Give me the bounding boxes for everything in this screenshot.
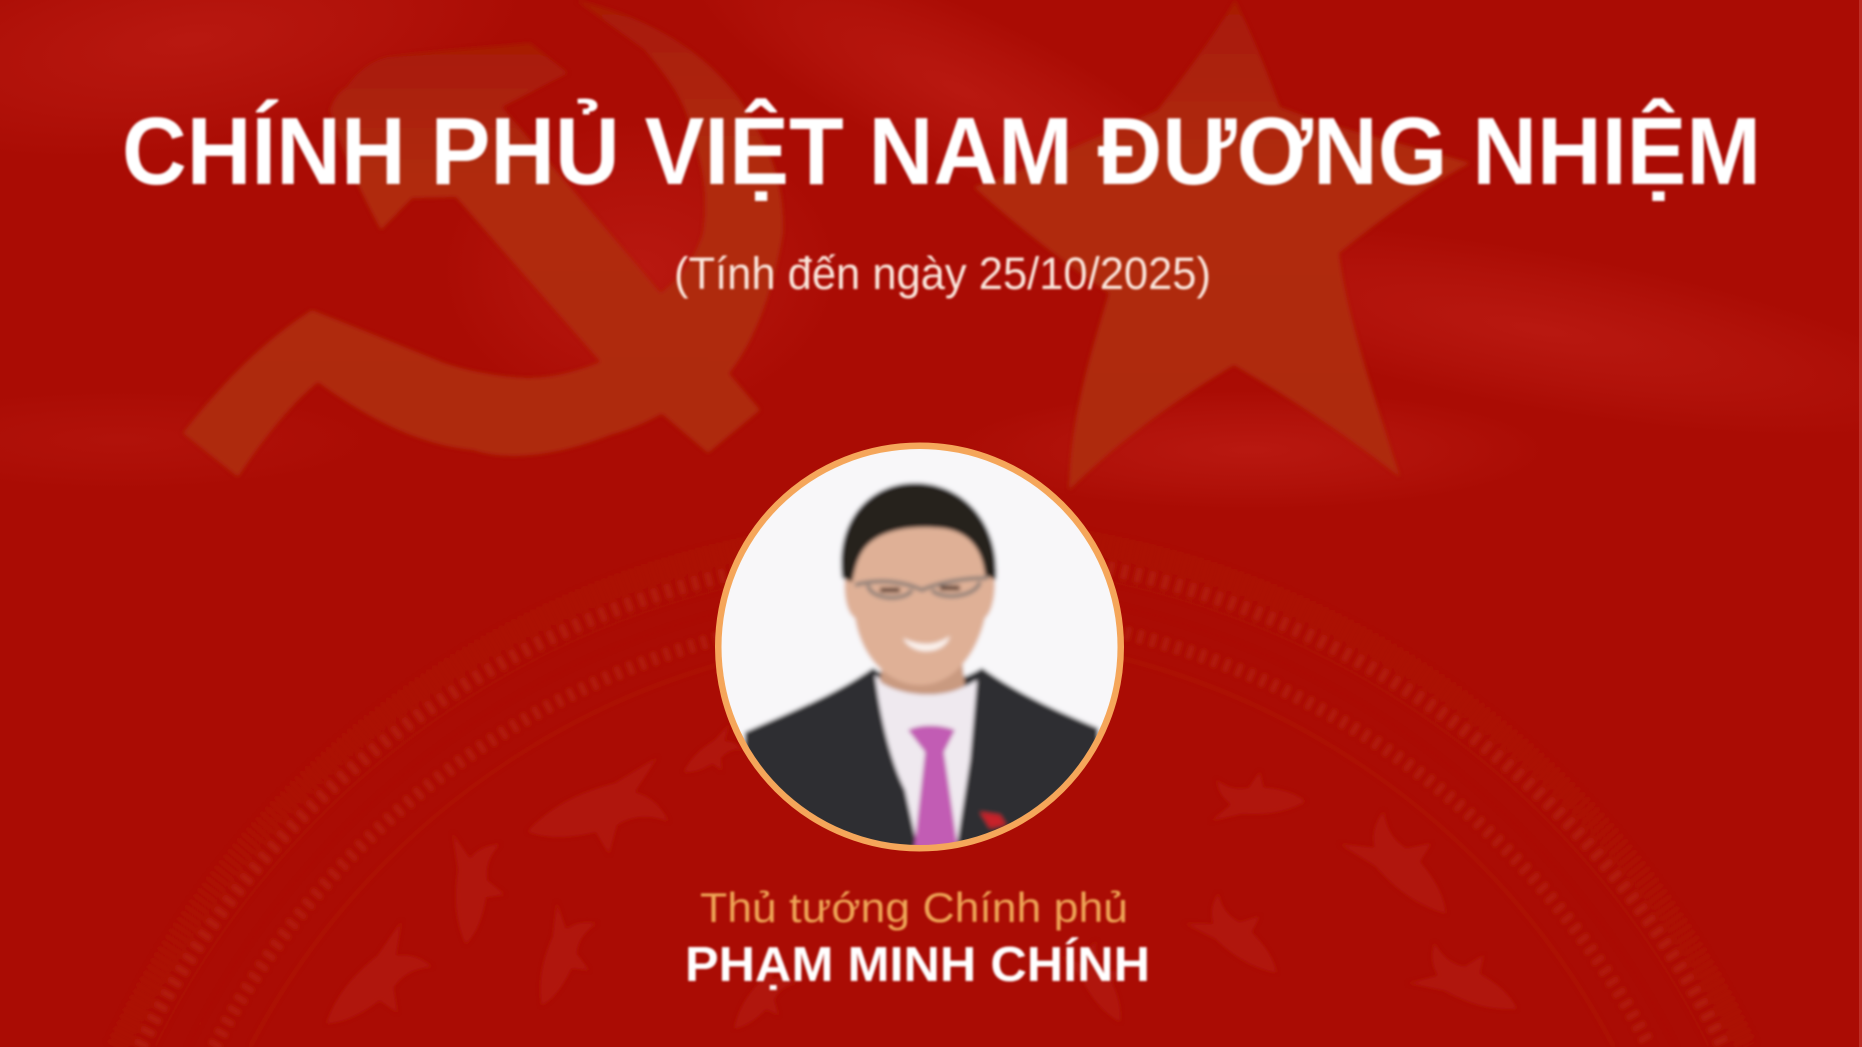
icon: hammer and sickle <box>183 0 783 477</box>
drum birds <box>301 723 1532 1047</box>
eyes <box>880 588 960 590</box>
lapel pin <box>980 812 1006 828</box>
suit <box>740 668 1100 860</box>
person name: PHẠM MINH CHÍNH <box>685 938 1150 992</box>
icon: star <box>974 0 1470 490</box>
portrait ring <box>718 446 1120 848</box>
portrait: prime minister <box>715 440 1125 860</box>
sickle <box>183 0 783 477</box>
title: CHÍNH PHỦ VIỆT NAM ĐƯƠNG NHIỆM <box>122 97 1761 205</box>
tie <box>908 726 958 850</box>
face <box>845 521 995 685</box>
neck <box>878 663 968 697</box>
portrait figure <box>715 440 1125 860</box>
hair <box>841 483 996 582</box>
role label: Thủ tướng Chính phủ <box>700 884 1128 931</box>
smile <box>903 636 950 651</box>
glasses <box>855 578 988 598</box>
hammer <box>330 43 760 453</box>
subtitle: date: (Tính đến ngày 25/10/2025) <box>674 248 1211 299</box>
background: bronze drum motif <box>117 529 1747 1047</box>
shirt <box>875 675 977 845</box>
